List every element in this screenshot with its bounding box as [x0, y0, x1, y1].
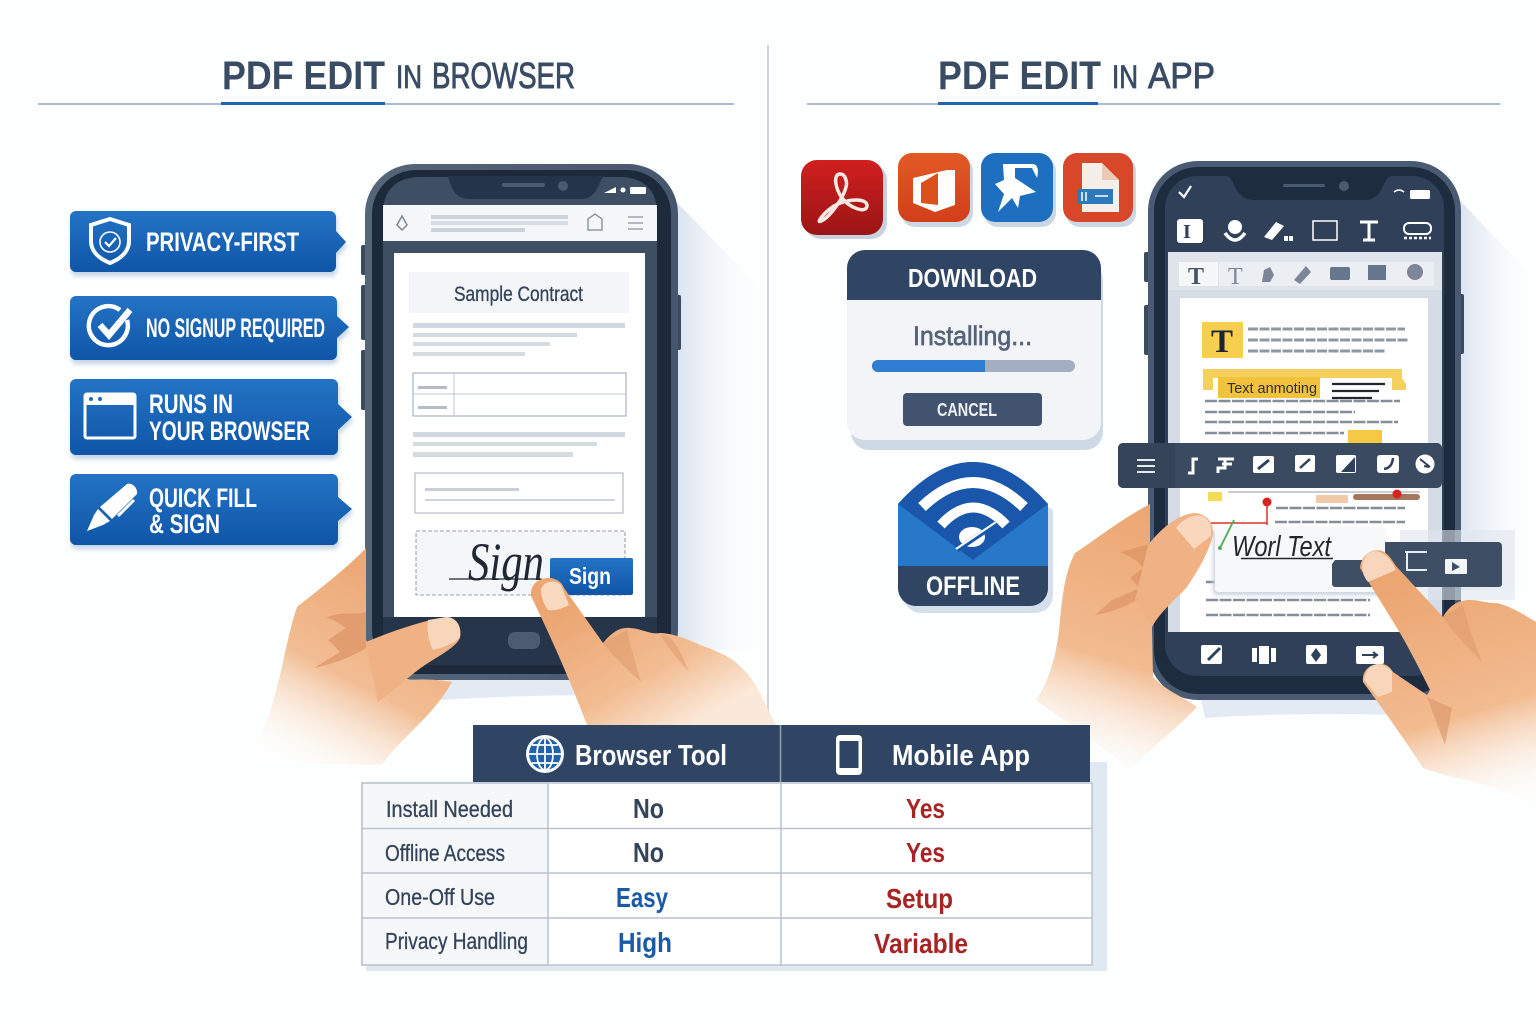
- badge: runs in your browser: [70, 379, 352, 455]
- icon: red document: [1063, 153, 1136, 227]
- illustration: right hand tapping app phone: [1360, 550, 1536, 805]
- signature field: Sign: [468, 532, 544, 592]
- badge: quick fill and sign: & SIGN: [149, 509, 220, 539]
- toolbar: light tool tabs: T: [1188, 264, 1204, 290]
- heading: PDF edit in browser: BROWSER: [432, 55, 575, 96]
- row: install needed: Install Needed: [386, 796, 513, 822]
- row: privacy handling: Variable: [874, 928, 968, 959]
- comparison table: [362, 725, 1107, 971]
- row: privacy handling: Privacy Handling: [385, 928, 528, 954]
- row: offline access: Yes: [906, 837, 945, 868]
- callout: word text card: [1215, 520, 1385, 592]
- badge: privacy-first: PRIVACY-FIRST: [146, 227, 299, 257]
- row: install needed: Yes: [906, 793, 945, 824]
- heading: PDF edit in app: [807, 54, 1500, 105]
- panel: download dialog: Installing...: [913, 321, 1032, 351]
- icon: status bar: [1179, 186, 1430, 199]
- heading: PDF edit in browser: IN: [396, 59, 422, 95]
- badge: no signup required: NO SIGNUP REQUIRED: [146, 313, 325, 343]
- badge: runs in your browser: YOUR BROWSER: [149, 416, 310, 446]
- badge: quick fill and sign: QUICK FILL: [149, 483, 257, 513]
- table header: [473, 725, 1090, 782]
- row: offline access: No: [633, 837, 664, 868]
- panel: browser features: [70, 211, 352, 545]
- label: text annotation: Text anmoting: [1227, 380, 1317, 397]
- icon: status bar: [604, 187, 646, 194]
- badge: privacy-first: [70, 211, 346, 272]
- badge: quick fill and sign: [70, 474, 352, 545]
- heading: PDF edit in app: APP: [1148, 55, 1215, 96]
- progress bar: [872, 360, 1075, 372]
- badge: no signup required: [70, 296, 349, 360]
- heading: PDF edit in browser: [38, 54, 734, 105]
- document: sample contract: Sample Contract: [454, 283, 583, 306]
- row: one-off use: Setup: [886, 883, 953, 914]
- row: offline access: Offline Access: [385, 840, 505, 866]
- icon: phone: [836, 735, 862, 775]
- badge: offline: [898, 462, 1053, 613]
- toolbar: light tool tabs: T: [1228, 264, 1243, 290]
- button: sign: [550, 558, 633, 595]
- document: annotated page: T: [1211, 324, 1233, 360]
- toolbar: light tool tabs: [1168, 252, 1442, 290]
- document: sample contract: [394, 253, 645, 617]
- table header: Mobile App: [892, 740, 1030, 772]
- illustration: app phone: [1144, 161, 1536, 718]
- icon: blue app: [981, 153, 1056, 227]
- row: one-off use: [385, 882, 953, 914]
- signature field: [416, 531, 625, 595]
- illustration: left hand holding browser phone: [250, 548, 460, 765]
- toolbar: floating edit bar: [1118, 443, 1442, 488]
- row: privacy handling: High: [618, 927, 672, 958]
- icon: acrobat: [801, 160, 887, 239]
- toolbar: dark tool icons: I: [1183, 221, 1191, 243]
- button: sign: Sign: [569, 563, 611, 589]
- row: install needed: No: [633, 793, 664, 824]
- row: one-off use: Easy: [616, 882, 668, 913]
- heading: PDF edit in app: PDF EDIT: [938, 54, 1101, 98]
- heading: PDF edit in browser: PDF EDIT: [222, 54, 385, 98]
- badge: offline: OFFLINE: [926, 571, 1020, 601]
- toolbar: floating handle: [1332, 530, 1515, 600]
- icon: globe: [526, 735, 564, 773]
- row: offline access: [385, 837, 945, 868]
- row: one-off use: One-Off Use: [385, 884, 495, 910]
- panel: download dialog: [847, 250, 1103, 450]
- illustration: left hand holding app phone: [1036, 504, 1213, 768]
- toolbar: dark tool icons: [1177, 219, 1431, 243]
- document: annotated page: [1168, 290, 1442, 632]
- panel: download dialog: DOWNLOAD: [908, 263, 1037, 293]
- callout: word text card: Worl Text: [1232, 531, 1333, 563]
- button: cancel: [903, 393, 1042, 426]
- table header: Browser Tool: [575, 740, 727, 772]
- panel: app icons: [801, 153, 1136, 239]
- icon: office: [898, 153, 973, 227]
- illustration: browser phone: [361, 164, 762, 700]
- heading: PDF edit in app: IN: [1112, 59, 1138, 95]
- row: privacy handling: [385, 927, 968, 959]
- badge: runs in your browser: RUNS IN: [149, 389, 233, 419]
- toolbar: bottom tool icons: [1201, 645, 1384, 664]
- illustration: right hand tapping browser phone: [531, 578, 776, 725]
- browser address bar: [383, 205, 657, 241]
- row: install needed: [386, 793, 945, 824]
- button: cancel: CANCEL: [937, 400, 997, 420]
